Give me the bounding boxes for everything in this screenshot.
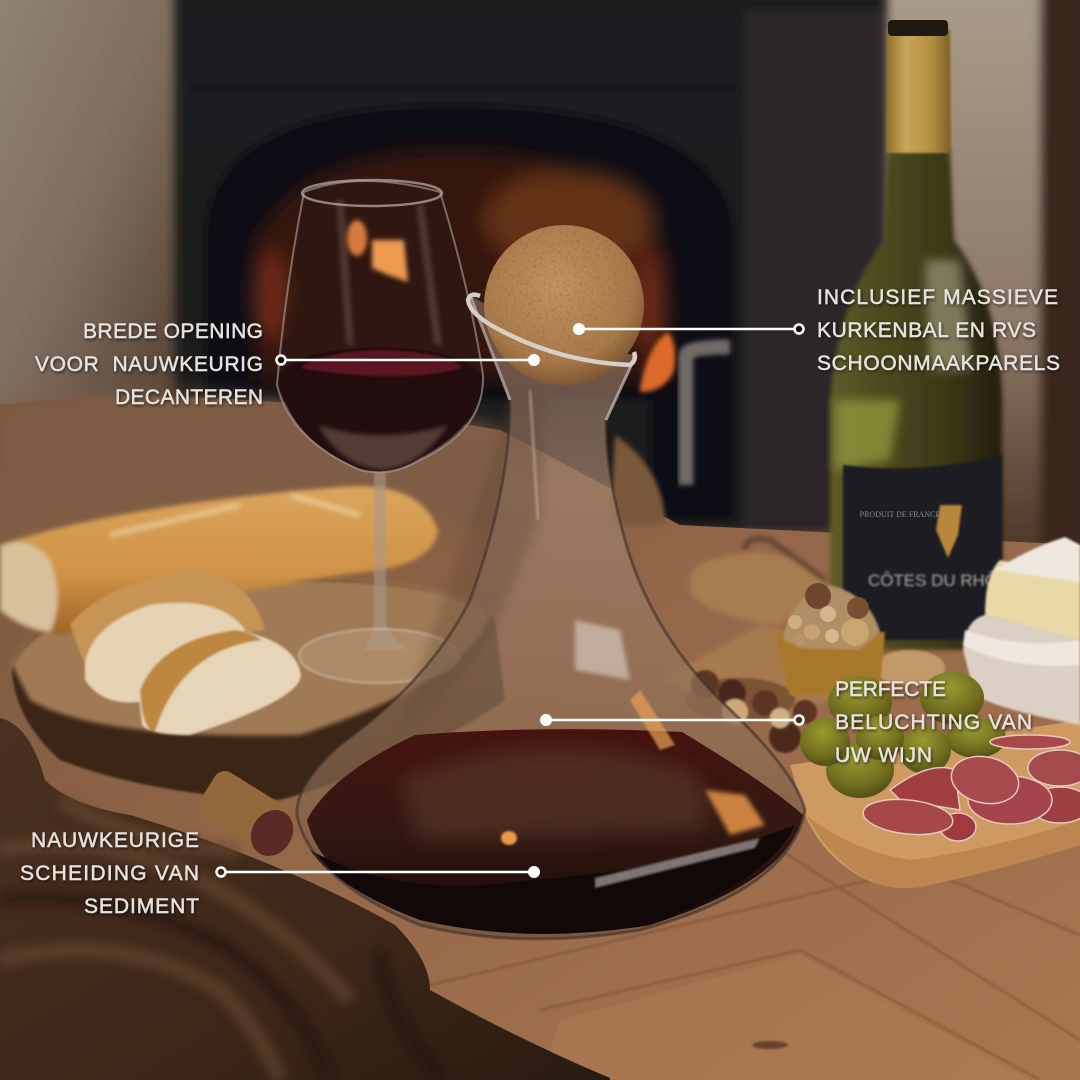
wine glass <box>277 180 483 683</box>
callout: brede opening: VOOR NAUWKEURIG <box>35 353 263 376</box>
callout: sediment <box>20 829 540 918</box>
decanter <box>297 295 805 939</box>
callout: beluchting <box>540 678 1032 767</box>
nuts on board <box>685 650 945 753</box>
bread slices <box>70 570 301 735</box>
callout: kurkenbal: SCHOONMAAKPARELS <box>817 352 1060 375</box>
wine in glass <box>278 347 483 471</box>
decanter body glass <box>297 295 805 939</box>
table <box>0 397 1080 1080</box>
callout: brede opening <box>35 320 540 409</box>
callout: brede opening: BREDE OPENING <box>83 320 263 343</box>
salami slices <box>861 735 1080 841</box>
wine bottle: CÔTES DU RHÔ <box>868 571 998 590</box>
table planks <box>430 850 1080 1080</box>
callout: beluchting: PERFECTE <box>835 678 946 701</box>
wine bottle <box>830 20 1002 650</box>
decanter wine <box>307 729 803 934</box>
decanter outline <box>297 400 805 939</box>
wall left <box>0 0 180 450</box>
bottle foil capsule <box>886 24 951 153</box>
callout: kurkenbal: INCLUSIEF MASSIEVE <box>817 286 1058 309</box>
glass cup with nuts <box>775 583 885 696</box>
callout: kurkenbal <box>573 286 1060 375</box>
small cork stopper <box>194 767 302 864</box>
wall right <box>885 0 1080 550</box>
cloth <box>0 718 610 1080</box>
cork ball <box>484 225 644 385</box>
stove handle <box>686 347 730 485</box>
glass bowl <box>277 181 483 472</box>
olives <box>800 672 1006 798</box>
fire reflections in decanter <box>705 790 765 835</box>
cheese <box>963 537 1080 725</box>
baguette bread <box>0 486 438 635</box>
callout: kurkenbal: KURKENBAL EN RVS <box>817 319 1036 342</box>
callout: beluchting: UW WIJN <box>835 744 932 767</box>
wood stove <box>175 0 885 530</box>
callout: brede opening: DECANTEREN <box>115 386 263 409</box>
callout: sediment: SEDIMENT <box>84 895 199 918</box>
callout: beluchting: BELUCHTING VAN <box>835 711 1032 734</box>
wooden slab <box>12 579 505 800</box>
decanter rim <box>468 295 635 365</box>
bottle label <box>843 455 1002 640</box>
glass outline <box>277 181 483 472</box>
callout: sediment: NAUWKEURIGE <box>31 829 199 852</box>
glass base and stem <box>299 470 459 683</box>
serving board with handle <box>660 539 830 720</box>
fire flame <box>640 332 675 392</box>
callout: sediment: SCHEIDING VAN <box>20 862 199 885</box>
bamboo cutting board <box>790 720 1080 888</box>
stove fire <box>254 150 670 380</box>
wine bottle: PRODUIT DE FRANCE <box>860 510 940 519</box>
fire reflection <box>372 240 408 282</box>
